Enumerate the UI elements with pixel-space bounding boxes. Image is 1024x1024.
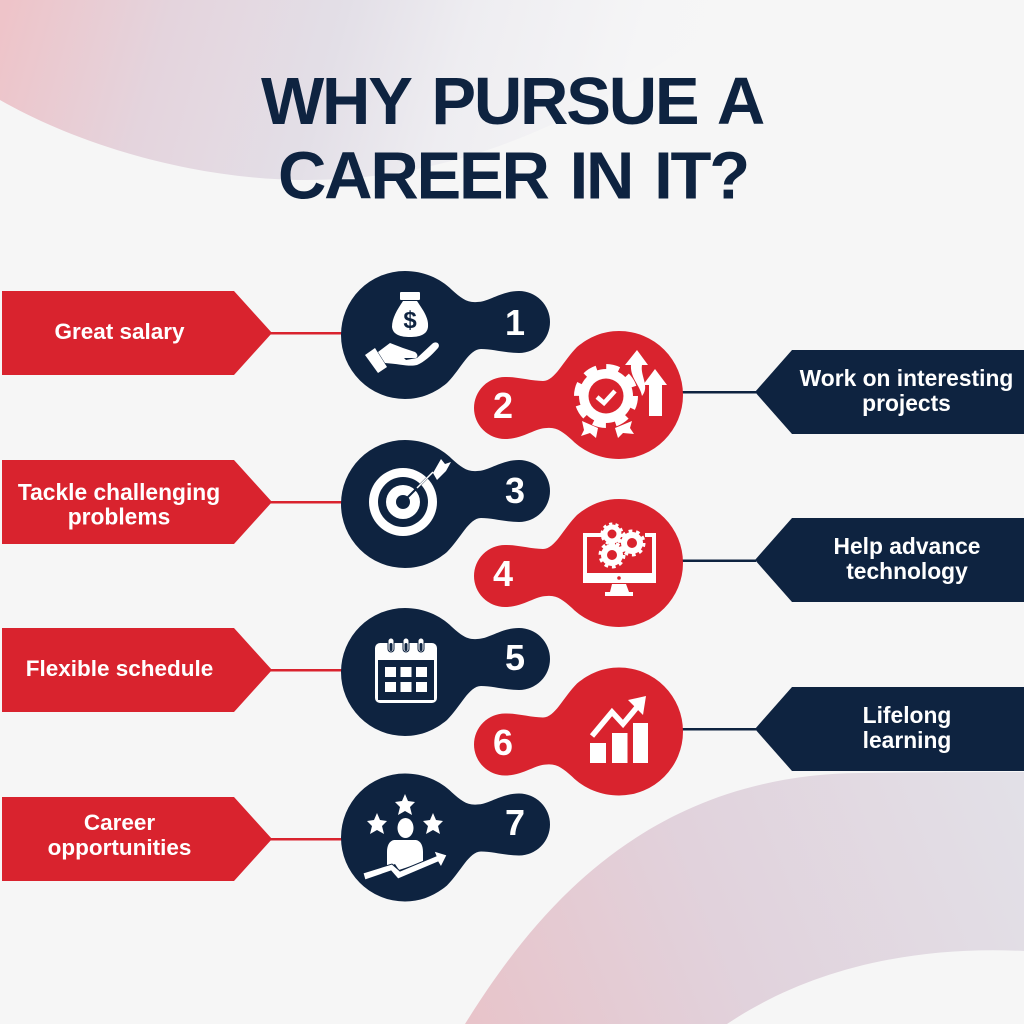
title: CAREER IN IT? — [278, 138, 748, 214]
number 7: 7 — [505, 802, 525, 843]
label: great salary: Great salary — [54, 319, 185, 344]
label: career opportunities — [2, 797, 272, 881]
label: lifelong learning — [755, 687, 1024, 771]
icon: gear with arrows — [577, 350, 667, 438]
connector 4 — [680, 560, 756, 562]
label: flexible schedule — [2, 628, 272, 712]
label: tackle challenging problems: problems — [68, 504, 170, 530]
decorative shape: bottom right swoosh — [465, 772, 1024, 1024]
label: great salary — [2, 291, 272, 375]
label: help advance technology — [755, 518, 1024, 602]
item 1: great salary — [2, 271, 550, 399]
blob 1 — [341, 271, 550, 399]
item 7: career opportunities — [2, 774, 550, 902]
icon: target with dart — [369, 459, 451, 536]
title: WHY PURSUE A — [261, 64, 764, 139]
label: help advance technology: Help advance — [834, 533, 980, 559]
number 3: 3 — [505, 470, 525, 511]
title — [261, 64, 764, 214]
blob 5 — [341, 608, 550, 736]
label: lifelong learning: Lifelong — [863, 702, 951, 728]
number 5: 5 — [505, 637, 525, 678]
icon: person with stars and arrow — [363, 794, 447, 880]
label: help advance technology: technology — [846, 558, 968, 584]
blob 3 — [341, 440, 550, 568]
label: career opportunities: Career — [84, 810, 155, 835]
number 1: 1 — [505, 302, 525, 343]
connector 2 — [680, 391, 756, 394]
label: flexible schedule: Flexible schedule — [26, 656, 213, 681]
icon: money bag and hand: $ — [403, 307, 417, 334]
item 4: advance technology — [474, 499, 1024, 627]
label: lifelong learning: learning — [863, 727, 951, 753]
number 4: 4 — [493, 553, 513, 594]
blob 4 — [474, 499, 683, 627]
number 2: 2 — [493, 385, 513, 426]
label: work on interesting projects: Work on interesting — [800, 365, 1013, 391]
icon: bar chart with rising arrow — [590, 696, 648, 763]
icon: money bag and hand — [365, 292, 439, 373]
label: work on interesting projects — [755, 350, 1024, 434]
icon: calendar — [375, 638, 437, 703]
icon: monitor with gears — [583, 524, 656, 596]
item 3: challenging problems — [2, 440, 550, 568]
connector 6 — [680, 728, 756, 730]
item 2: interesting projects — [474, 331, 1024, 459]
blob 6 — [474, 668, 683, 796]
label: work on interesting projects: projects — [862, 390, 951, 416]
number 6: 6 — [493, 722, 513, 763]
connector 1 — [270, 332, 345, 334]
label: tackle challenging problems: Tackle challenging — [18, 479, 220, 505]
connector 7 — [270, 838, 345, 840]
label: tackle challenging problems — [2, 460, 272, 544]
blob 7 — [341, 774, 550, 902]
item 6: lifelong learning — [474, 668, 1024, 796]
label: career opportunities: opportunities — [48, 835, 191, 860]
decorative shape: top left swoosh — [0, 0, 760, 180]
connector 3 — [270, 501, 345, 504]
connector 5 — [270, 669, 345, 672]
blob 2 — [474, 331, 683, 459]
item 5: flexible schedule — [2, 608, 550, 736]
